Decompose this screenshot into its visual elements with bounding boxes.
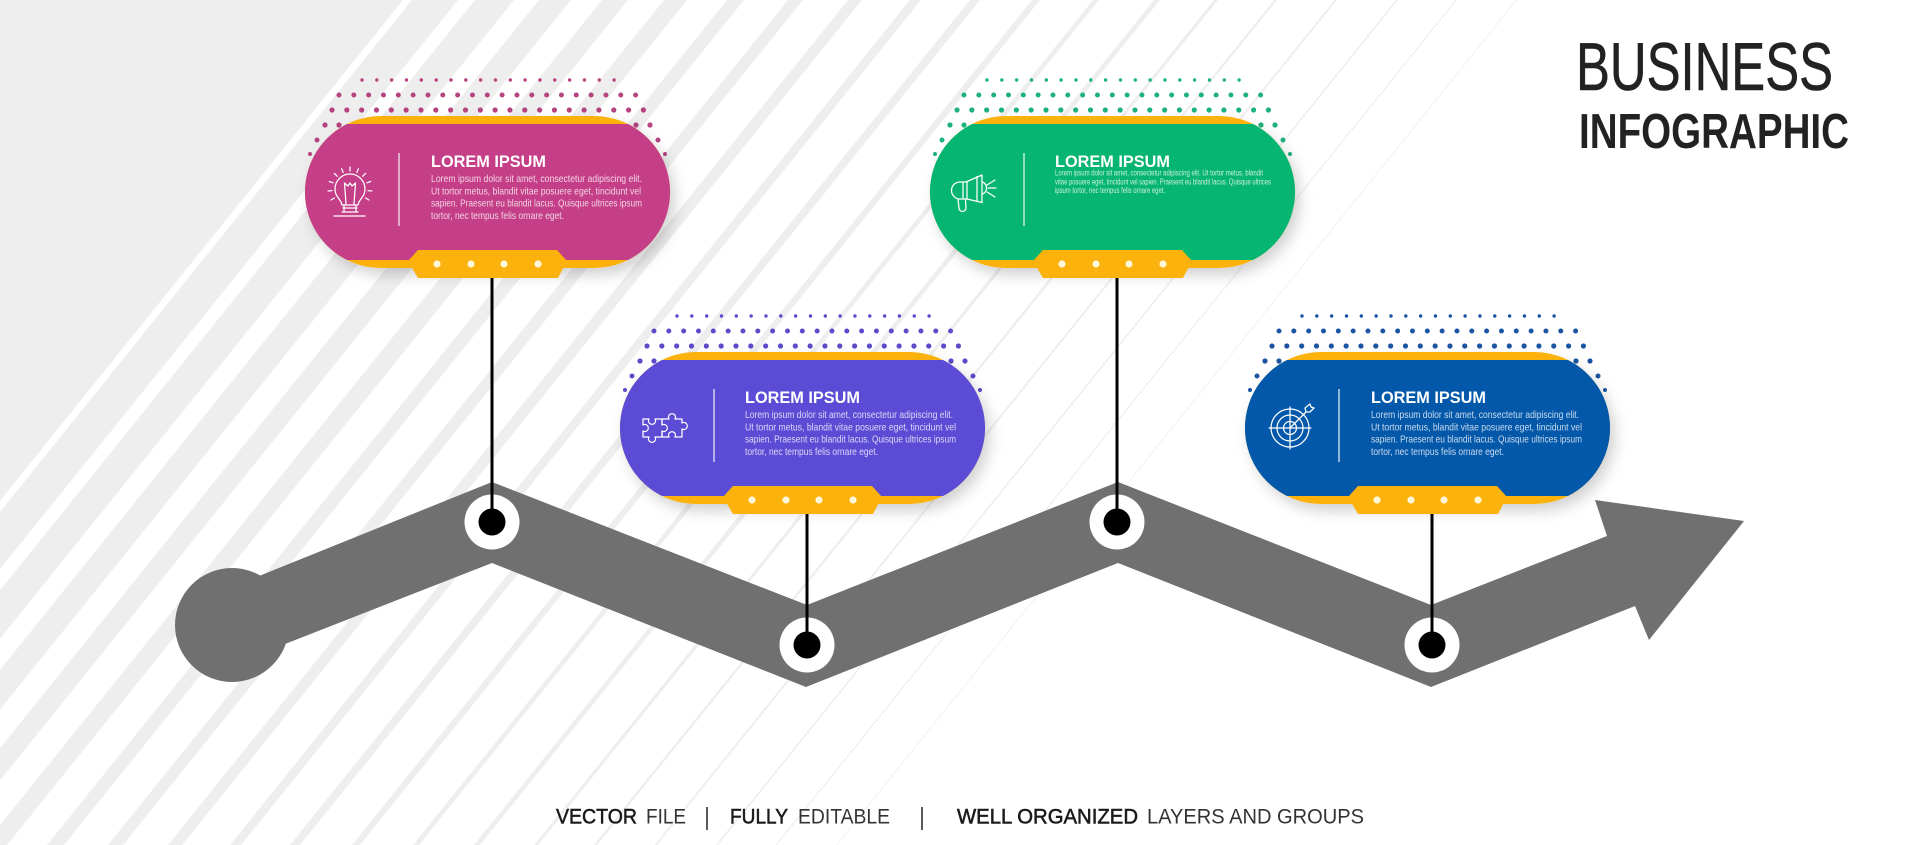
halftone dots blue [1250, 316, 1605, 390]
footer tagline [556, 806, 1364, 830]
body text [1055, 168, 1271, 195]
body text: Lorem ipsum dolor sit amet, consectetur adipiscing elit. [1371, 409, 1579, 421]
body text: Lorem ipsum dolor sit amet, consectetur adipiscing elit. [745, 409, 953, 421]
node 2 [780, 618, 834, 672]
yellow tab with dots [1033, 250, 1192, 278]
connector line 3 [1116, 276, 1118, 522]
heading: LOREM IPSUM [431, 152, 546, 171]
divider [398, 153, 400, 226]
body text: tortor, nec tempus felis ornare eget. [745, 446, 878, 458]
halftone dots pink [310, 80, 665, 154]
connector line 2 [806, 512, 808, 645]
footer tagline: FILE [646, 806, 686, 828]
body text: Lorem ipsum dolor sit amet, consectetur adipiscing elit. Ut tortor metus, blandit [1055, 168, 1264, 178]
connector line 1 [490, 276, 494, 522]
panel: step 2 purple [620, 316, 985, 514]
halftone dots green [935, 80, 1290, 154]
divider [1023, 153, 1025, 226]
yellow tab with dots [723, 486, 882, 514]
node 3 [1090, 494, 1144, 550]
title [1576, 29, 1849, 159]
yellow tab with dots [1348, 486, 1507, 514]
connector line 4 [1430, 512, 1434, 645]
body text: ipsum tortor, nec tempus felis ornare eget. [1055, 186, 1165, 195]
colored capsule [620, 360, 985, 496]
yellow capsule [930, 116, 1295, 268]
body text: sapien. Praesent eu blandit lacus. Quisque ultrices ipsum [745, 434, 956, 446]
body text [745, 409, 956, 458]
heading: LOREM IPSUM [1371, 388, 1486, 407]
title: INFOGRAPHIC [1579, 105, 1849, 159]
yellow tab with dots [408, 250, 567, 278]
footer tagline: WELL ORGANIZED [957, 806, 1138, 828]
body text: tortor, nec tempus felis ornare eget. [1371, 446, 1504, 458]
footer tagline: VECTOR [556, 806, 637, 828]
footer tagline: FULLY [730, 806, 788, 828]
colored capsule [1245, 360, 1610, 496]
heading: LOREM IPSUM [745, 388, 860, 407]
yellow capsule [305, 116, 670, 268]
zigzag arrow path [175, 482, 1744, 687]
icon: megaphone [952, 175, 996, 212]
body text [1371, 409, 1582, 458]
footer tagline: LAYERS AND GROUPS [1147, 806, 1364, 828]
divider [1338, 389, 1340, 462]
title: BUSINESS [1576, 29, 1833, 105]
panel: step 1 pink [305, 80, 670, 278]
panel: step 4 blue [1245, 316, 1610, 514]
yellow capsule [620, 352, 985, 504]
body text: tortor, nec tempus felis ornare eget. [431, 210, 564, 222]
icon: light bulb [328, 167, 372, 216]
divider [713, 389, 715, 462]
yellow capsule [1245, 352, 1610, 504]
footer tagline: EDITABLE [798, 806, 890, 828]
body text: sapien. Praesent eu blandit lacus. Quisque ultrices ipsum [1371, 434, 1582, 446]
node 1 [464, 494, 520, 550]
icon: puzzle [643, 414, 687, 442]
icon: target [1269, 404, 1314, 449]
panel: step 3 green [930, 80, 1295, 278]
body text: Ut tortor metus, blandit vitae posuere eget, tincidunt vel [431, 185, 641, 197]
heading: LOREM IPSUM [1055, 152, 1170, 171]
node 4 [1404, 618, 1460, 672]
body text: vitae posuere eget, tincidunt vel sapien. Praesent eu blandit lacus. Quisque ultrices [1055, 177, 1271, 186]
body text: Ut tortor metus, blandit vitae posuere eget, tincidunt vel [1371, 421, 1582, 433]
body text: Lorem ipsum dolor sit amet, consectetur adipiscing elit. [431, 173, 642, 185]
colored capsule [930, 124, 1295, 260]
body text [431, 173, 642, 222]
body text: Ut tortor metus, blandit vitae posuere eget, tincidunt vel [745, 421, 956, 433]
body text: sapien. Praesent eu blandit lacus. Quisque ultrices ipsum [431, 198, 642, 210]
halftone dots purple [625, 316, 980, 390]
colored capsule [305, 124, 670, 260]
